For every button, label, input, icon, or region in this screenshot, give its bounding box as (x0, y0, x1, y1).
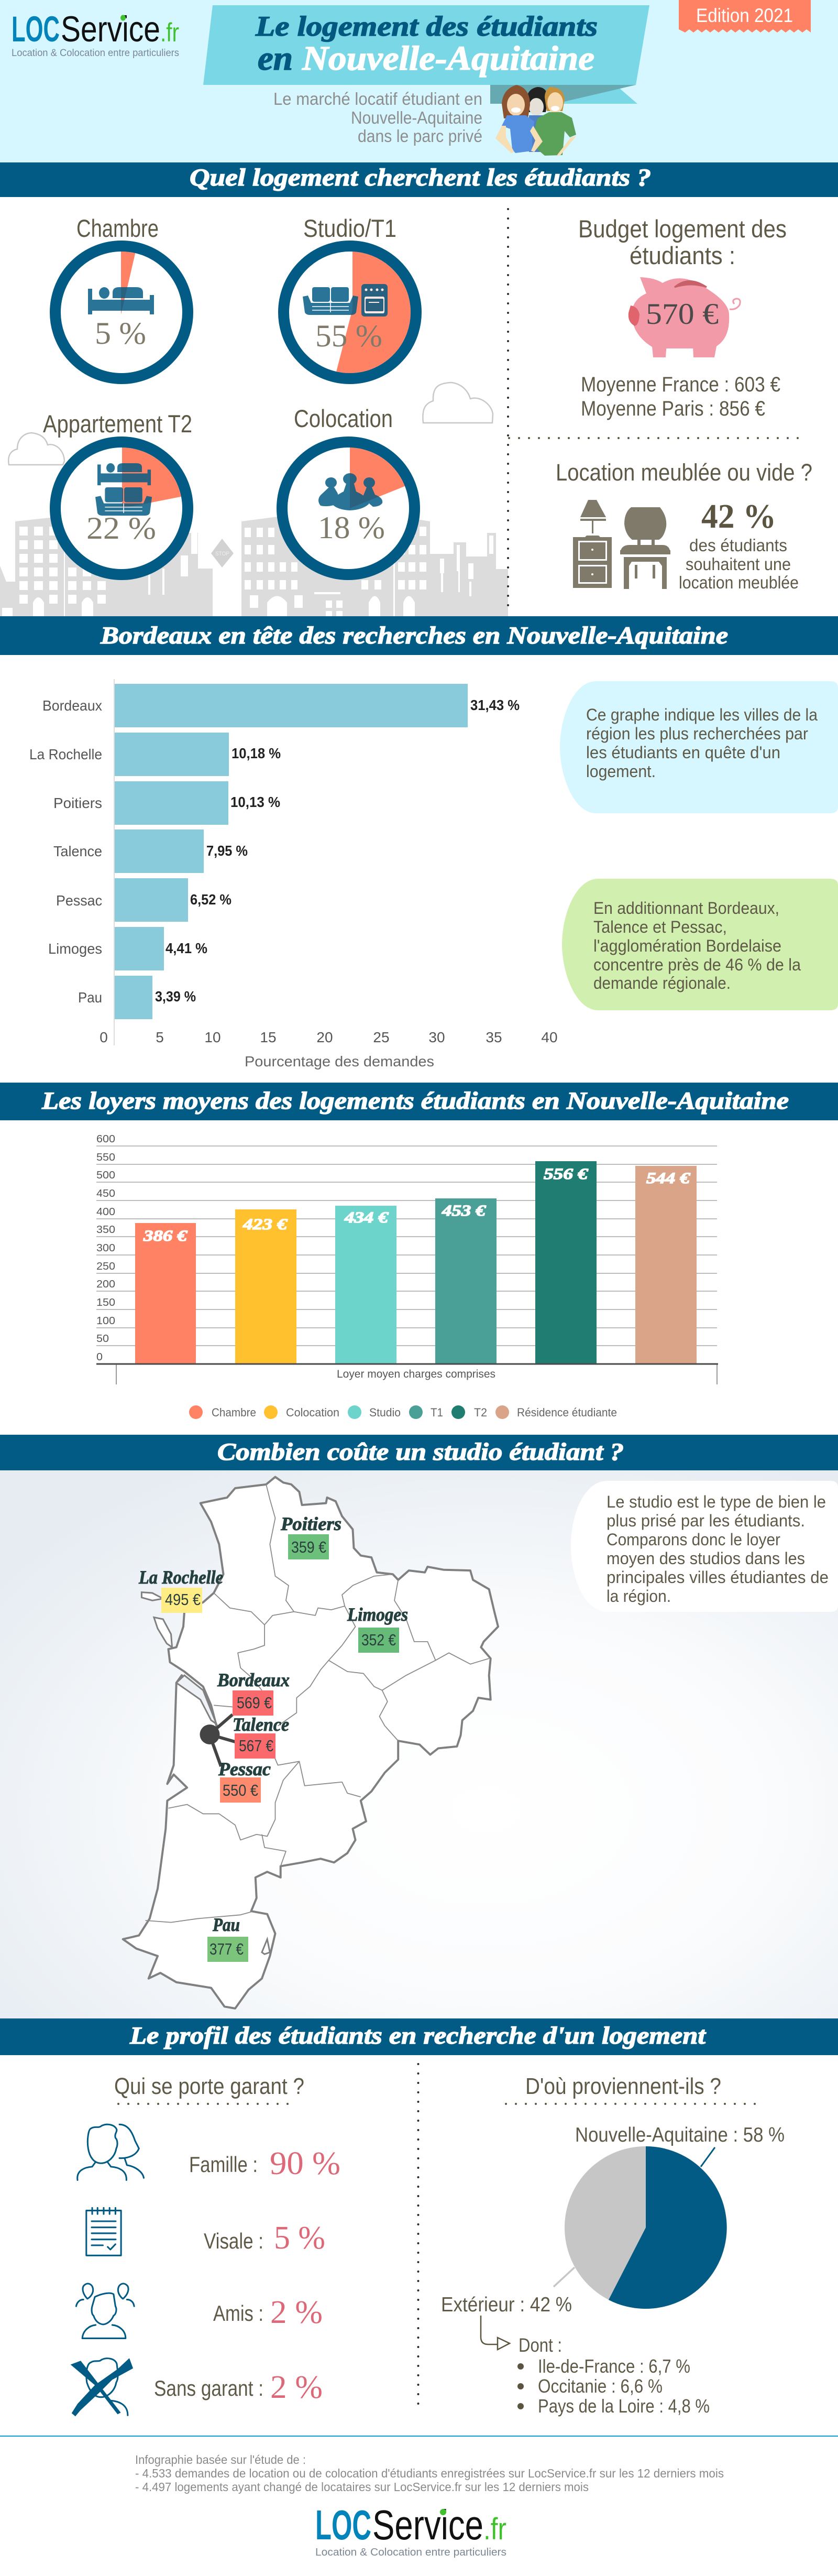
donut: studio: 55 % (315, 319, 382, 353)
heading band: studio (0, 1435, 838, 1470)
city: Limoges: Limoges (347, 1604, 408, 1625)
icon: people (318, 473, 382, 510)
callout: agglomeration: En additionnant Bordeaux, (593, 899, 779, 918)
city: Pessac: 550 € (223, 1781, 258, 1799)
stop sign: STOP (215, 551, 229, 557)
callout: studio: la région. (607, 1587, 671, 1606)
panel: garant: 5 % (274, 2220, 325, 2256)
logo: LocService (12, 9, 179, 59)
panel: provenance (441, 2073, 785, 2417)
panel: budget: Moyenne France : 603 € (581, 373, 780, 396)
icon: chair (620, 507, 670, 589)
subtitle: dans le parc privé (358, 126, 482, 146)
illustration: students (495, 85, 576, 156)
bar chart: loyers moyens: 550 (96, 1152, 115, 1163)
subtitle: Le marché locatif étudiant en (273, 89, 482, 108)
logo: LocService: .fr (160, 18, 179, 47)
map background (0, 1470, 838, 2018)
bar chart: demandes par ville: 10 (204, 1029, 221, 1045)
bar chart: demandes par ville: Talence (53, 843, 102, 859)
donut: colocation: Colocation (294, 405, 393, 432)
callout: agglomeration: l'agglomération Bordelaise (593, 936, 781, 955)
bar chart: loyers moyens: 50 (96, 1333, 109, 1345)
bar chart: demandes par ville: 40 (541, 1029, 558, 1045)
panel: garant: Famille : (189, 2152, 258, 2177)
donut: appartement T2 (43, 410, 192, 574)
chart legend: T1 (431, 1406, 443, 1419)
footer sources (135, 2453, 724, 2494)
bar chart: demandes par ville: Pau (78, 989, 102, 1006)
icon: friends (76, 2284, 134, 2338)
panel: provenance: Extérieur : 42 % (441, 2294, 572, 2316)
bar chart: loyers moyens: 0 (96, 1351, 103, 1363)
panel: location meublee: 42 % (701, 497, 776, 536)
callout: agglomeration: demande régionale. (593, 974, 731, 992)
city: Limoges (347, 1604, 408, 1653)
icon: oven (361, 284, 388, 316)
bar chart: demandes par ville: 5 (156, 1029, 164, 1045)
city: Pessac (218, 1759, 271, 1803)
footer logo (315, 2502, 506, 2558)
callout: graphe: Ce graphe indique les villes de la (586, 705, 818, 724)
footer logo: .fr (483, 2512, 506, 2546)
bar chart: loyers moyens: 600 (96, 1133, 115, 1145)
heading band: bordeaux: Bordeaux en tête des recherches en Nouvelle-Aquitaine (100, 622, 728, 649)
footer logo: LOC (315, 2502, 371, 2548)
logo: LocService: LOC (12, 9, 60, 49)
panel: garant: Sans garant : (154, 2376, 263, 2400)
city: Bordeaux: Bordeaux (217, 1669, 290, 1690)
islands and estuary (141, 1592, 270, 1954)
heading band: profil (0, 2018, 838, 2055)
city: La Rochelle: 495 € (165, 1590, 201, 1609)
list: regions: Pays de la Loire : 4,8 % (538, 2395, 710, 2417)
bar chart: demandes par ville: 35 (486, 1029, 502, 1045)
callout: studio: Le studio est le type de bien le (607, 1492, 826, 1511)
bar chart: loyers moyens: 544 € (646, 1170, 690, 1187)
subtitle: Nouvelle-Aquitaine (351, 108, 482, 127)
footer rule (0, 2436, 838, 2437)
city skyline background (0, 515, 508, 616)
chart legend: Chambre (212, 1406, 256, 1419)
city: Talence: Talence (233, 1714, 289, 1735)
bar chart: demandes par ville: 0 (100, 1029, 108, 1045)
bar chart: demandes par ville: 7,95 % (206, 843, 248, 859)
heading band: quel logement: Quel logement cherchent les étudiants ? (190, 164, 651, 191)
bar chart: loyers moyens: 200 (96, 1279, 115, 1290)
city: Poitiers: Poitiers (280, 1513, 341, 1534)
city: La Rochelle (138, 1567, 223, 1613)
panel: budget: Moyenne Paris : 856 € (581, 397, 765, 420)
bar chart: loyers moyens: Loyer moyen charges comprises (337, 1368, 495, 1380)
bar chart: loyers moyens: 450 (96, 1188, 115, 1199)
city: La Rochelle: La Rochelle (138, 1567, 223, 1588)
city: Bordeaux (217, 1669, 290, 1716)
bar chart: demandes par ville: Bordeaux (42, 697, 102, 714)
panel: provenance: Dont : (519, 2334, 562, 2356)
panel: garant (71, 2073, 340, 2416)
bar chart: loyers moyens: 150 (96, 1297, 115, 1308)
footer sources: - 4.497 logements ayant changé de locataires sur LocService.fr sur les 12 derniers mois (135, 2480, 589, 2494)
logo: LocService: Location & Colocation entre particuliers (12, 48, 179, 59)
panel: location meublee (556, 459, 812, 592)
bar chart: demandes par ville: Limoges (48, 941, 102, 957)
donut: studio: Studio/T1 (303, 214, 396, 242)
chart legend: Résidence étudiante (517, 1406, 617, 1419)
bar chart: loyers moyens: 100 (96, 1315, 115, 1327)
panel: budget: étudiants : (630, 242, 735, 269)
logo: LocService: Service (61, 9, 160, 49)
callout: graphe (560, 681, 838, 813)
chart legend: Studio (369, 1406, 401, 1419)
heading band: quel logement (0, 162, 838, 197)
subtitle (273, 89, 482, 146)
donut: appartement T2: 22 % (86, 511, 156, 545)
panel: garant: 2 % (270, 2370, 323, 2405)
bar chart: demandes par ville: 25 (373, 1029, 390, 1045)
city: Poitiers (280, 1513, 341, 1559)
panel: garant: Visale : (204, 2229, 263, 2253)
arrow (481, 2316, 510, 2350)
map: Nouvelle-Aquitaine (123, 1477, 498, 2009)
donut: colocation: 18 % (318, 510, 385, 545)
city: Poitiers: 359 € (291, 1538, 326, 1556)
panel: location meublee: des étudiants (689, 536, 787, 555)
bar chart: loyers moyens: 300 (96, 1242, 115, 1254)
city: Pessac: Pessac (218, 1759, 271, 1780)
chart legend: Colocation (286, 1406, 339, 1419)
panel: budget: 570 € (646, 298, 719, 331)
panel: garant: Qui se porte garant ? (114, 2073, 304, 2099)
callout: studio: Comparons donc le loyer (607, 1530, 780, 1549)
callout: studio: moyen des studios dans les (607, 1549, 805, 1568)
pie chart (554, 2146, 727, 2309)
title: en (258, 39, 293, 78)
icon: bed (97, 463, 151, 485)
bar chart: demandes par ville: 20 (316, 1029, 333, 1045)
city: Pau (207, 1914, 248, 1962)
icon: document (86, 2208, 121, 2255)
title: Le logement des étudiants (255, 10, 598, 42)
panel: provenance: D'où proviennent-ils ? (525, 2073, 721, 2099)
title (255, 10, 598, 78)
callout: studio (571, 1481, 838, 1612)
panel: garant: 2 % (270, 2295, 323, 2330)
footer sources: - 4.533 demandes de location ou de colocation d'étudiants enregistrées sur LocService.fr sur les 12 derniers mois (135, 2466, 724, 2480)
city: Talence (233, 1714, 289, 1759)
callout: agglomeration: concentre près de 46 % de la (593, 955, 801, 974)
bar chart: demandes par ville: Pourcentage des demandes (245, 1053, 434, 1069)
footer logo: Service (372, 2502, 483, 2548)
edition tag (679, 0, 811, 32)
bar chart: loyers moyens: 556 € (544, 1165, 588, 1183)
callout: graphe: logement. (586, 762, 656, 781)
divider dotted (417, 2064, 419, 2406)
city: Talence: 567 € (239, 1737, 273, 1755)
bar chart: demandes par ville: 10,13 % (230, 794, 280, 810)
panel: location meublee: location meublée (679, 573, 799, 592)
heading band: profil: Le profil des étudiants en recherche d'un logement (129, 2022, 707, 2049)
donut: chambre (56, 214, 188, 378)
icon: lamp and cabinet (573, 500, 612, 588)
panel: garant: 90 % (270, 2146, 340, 2181)
cloud right (423, 383, 493, 423)
callout: graphe: les étudiants en quête d'un (586, 743, 780, 762)
bar chart: loyers moyens: 386 € (143, 1227, 188, 1245)
panel: location meublee: souhaitent une (686, 554, 791, 574)
divider dotted (508, 209, 801, 608)
donut: chambre: Chambre (76, 214, 159, 242)
bar chart: loyers moyens: 423 € (242, 1216, 288, 1233)
title ribbon (203, 5, 649, 104)
bar chart: demandes par ville: 31,43 % (470, 697, 520, 713)
footer logo: Location & Colocation entre particuliers (315, 2547, 506, 2558)
panel: provenance: Nouvelle-Aquitaine : 58 % (575, 2124, 785, 2146)
map pointer: agglomeration bordelaise (200, 1715, 235, 1766)
footer sources: Infographie basée sur l'étude de : (135, 2453, 306, 2466)
icon: sofa (303, 287, 358, 315)
chart legend: T2 (474, 1406, 487, 1419)
list: regions: Occitanie : 6,6 % (538, 2375, 663, 2397)
bar chart: loyers moyens: 350 (96, 1224, 115, 1236)
bar chart: loyers moyens: 500 (96, 1170, 115, 1181)
department borders (146, 1485, 489, 1923)
icon: no guarantor (71, 2358, 133, 2416)
bar chart: loyers moyens (96, 1133, 718, 1419)
donut: colocation (282, 405, 419, 574)
donut: appartement T2: Appartement T2 (43, 410, 192, 438)
callout: agglomeration (562, 879, 838, 1010)
panel: budget (578, 215, 787, 420)
heading band: loyers (0, 1083, 838, 1120)
chart legend (189, 1405, 617, 1419)
donut: studio (284, 214, 419, 380)
callout: graphe: région les plus recherchées par (586, 724, 808, 743)
cloud left (8, 433, 64, 465)
bar chart: demandes par ville (29, 679, 558, 1069)
list: regions: Ile-de-France : 6,7 % (538, 2355, 690, 2377)
donut: chambre: 5 % (95, 316, 146, 351)
bar chart: demandes par ville: 15 (260, 1029, 277, 1045)
panel: budget: Budget logement des (578, 215, 787, 243)
heading band: bordeaux (0, 616, 838, 655)
bar chart: demandes par ville: 6,52 % (190, 891, 231, 908)
heading band: studio: Combien coûte un studio étudiant ? (217, 1438, 624, 1466)
icon: piggy bank (629, 277, 740, 357)
heading band: loyers: Les loyers moyens des logements étudiants en Nouvelle-Aquitaine (41, 1087, 789, 1115)
icon: sofa (95, 487, 152, 516)
bar chart: loyers moyens: 250 (96, 1261, 115, 1272)
city: Limoges: 352 € (361, 1631, 396, 1649)
panel: location meublee: Location meublée ou vide ? (556, 459, 812, 486)
header background (0, 0, 838, 162)
list: regions (517, 2355, 710, 2417)
panel: garant: Amis : (213, 2301, 263, 2326)
title: Nouvelle-Aquitaine (302, 39, 594, 78)
bar chart: loyers moyens: 400 (96, 1206, 115, 1218)
callout: studio: principales villes étudiantes de (607, 1568, 829, 1587)
bar chart: loyers moyens: 453 € (442, 1202, 486, 1219)
bar chart: demandes par ville: Pessac (56, 892, 102, 909)
bar chart: demandes par ville: 10,18 % (231, 745, 281, 761)
bar chart: demandes par ville: 30 (428, 1029, 445, 1045)
callout: agglomeration: Talence et Pessac, (593, 918, 727, 936)
edition tag: Edition 2021 (696, 5, 793, 26)
bar chart: loyers moyens: 434 € (344, 1209, 389, 1226)
bar chart: demandes par ville: La Rochelle (29, 746, 102, 762)
icon: family (78, 2124, 144, 2180)
bar chart: demandes par ville: Poitiers (53, 795, 102, 811)
icon: bed (88, 287, 154, 314)
city: Pau: 377 € (210, 1940, 244, 1958)
bar chart: demandes par ville: 3,39 % (155, 988, 196, 1005)
city: Bordeaux: 569 € (237, 1694, 272, 1712)
city: Pau: Pau (212, 1914, 240, 1935)
bar chart: demandes par ville: 4,41 % (166, 940, 207, 956)
callout: studio: plus prisé par les étudiants. (607, 1511, 805, 1530)
stop sign (211, 539, 234, 616)
